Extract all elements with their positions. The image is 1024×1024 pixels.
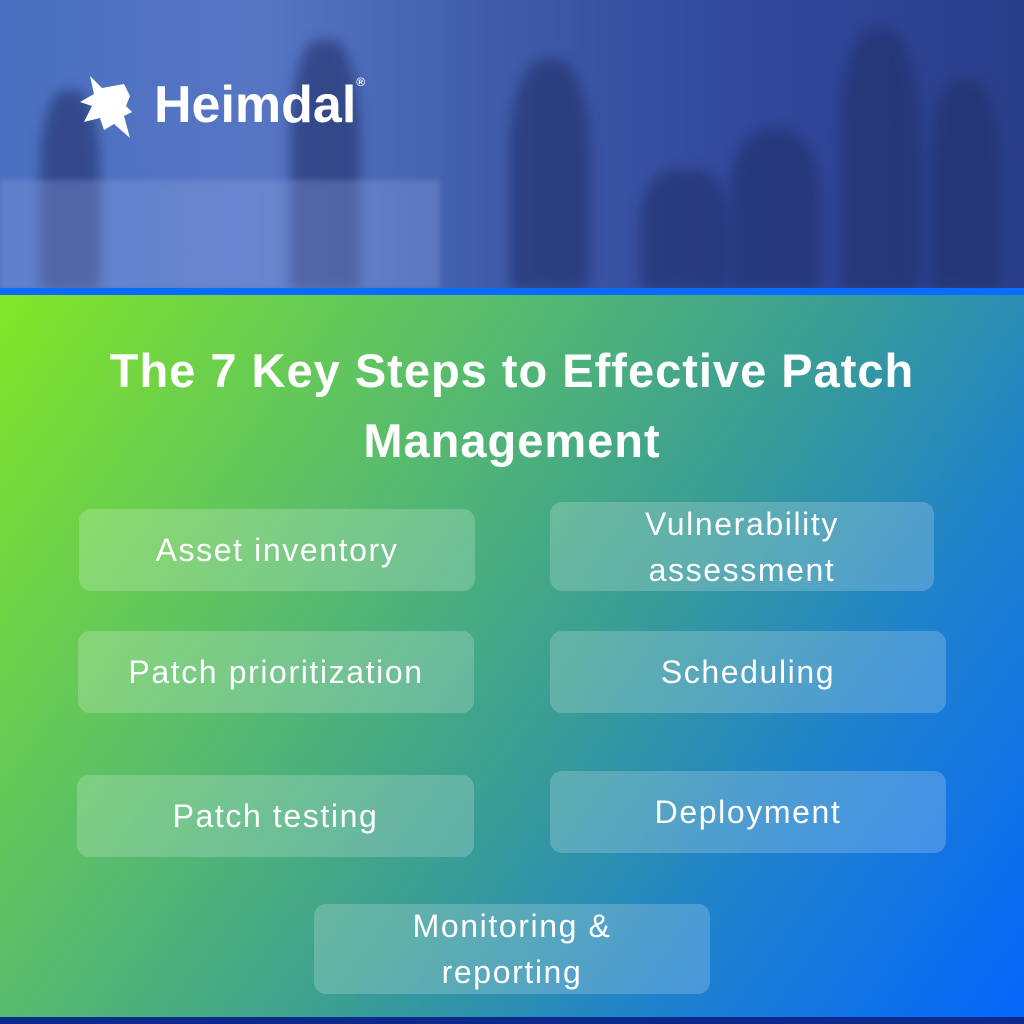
step 1	[79, 509, 475, 591]
title	[110, 344, 914, 467]
step 2	[550, 502, 934, 591]
step 6	[550, 771, 946, 853]
main gradient panel	[0, 295, 1024, 1017]
step 7: Monitoring &	[413, 908, 611, 944]
step 2: assessment	[649, 552, 835, 588]
logo text: Heimdal®	[154, 75, 365, 134]
icon: viking head	[80, 76, 132, 138]
step 4: Scheduling	[661, 654, 835, 690]
step 4	[550, 631, 946, 713]
step 1: Asset inventory	[156, 532, 398, 568]
title: The 7 Key Steps to Effective Patch	[110, 344, 914, 397]
header photo	[0, 0, 1024, 288]
step 6: Deployment	[655, 794, 841, 830]
step 3	[78, 631, 474, 713]
step 3: Patch prioritization	[128, 654, 424, 690]
step 5	[77, 775, 474, 857]
step 7	[314, 904, 710, 994]
step 2: Vulnerability	[645, 506, 839, 542]
step 5: Patch testing	[173, 798, 378, 834]
title: Management	[363, 414, 661, 467]
logo	[80, 75, 365, 138]
step 7: reporting	[442, 954, 582, 990]
